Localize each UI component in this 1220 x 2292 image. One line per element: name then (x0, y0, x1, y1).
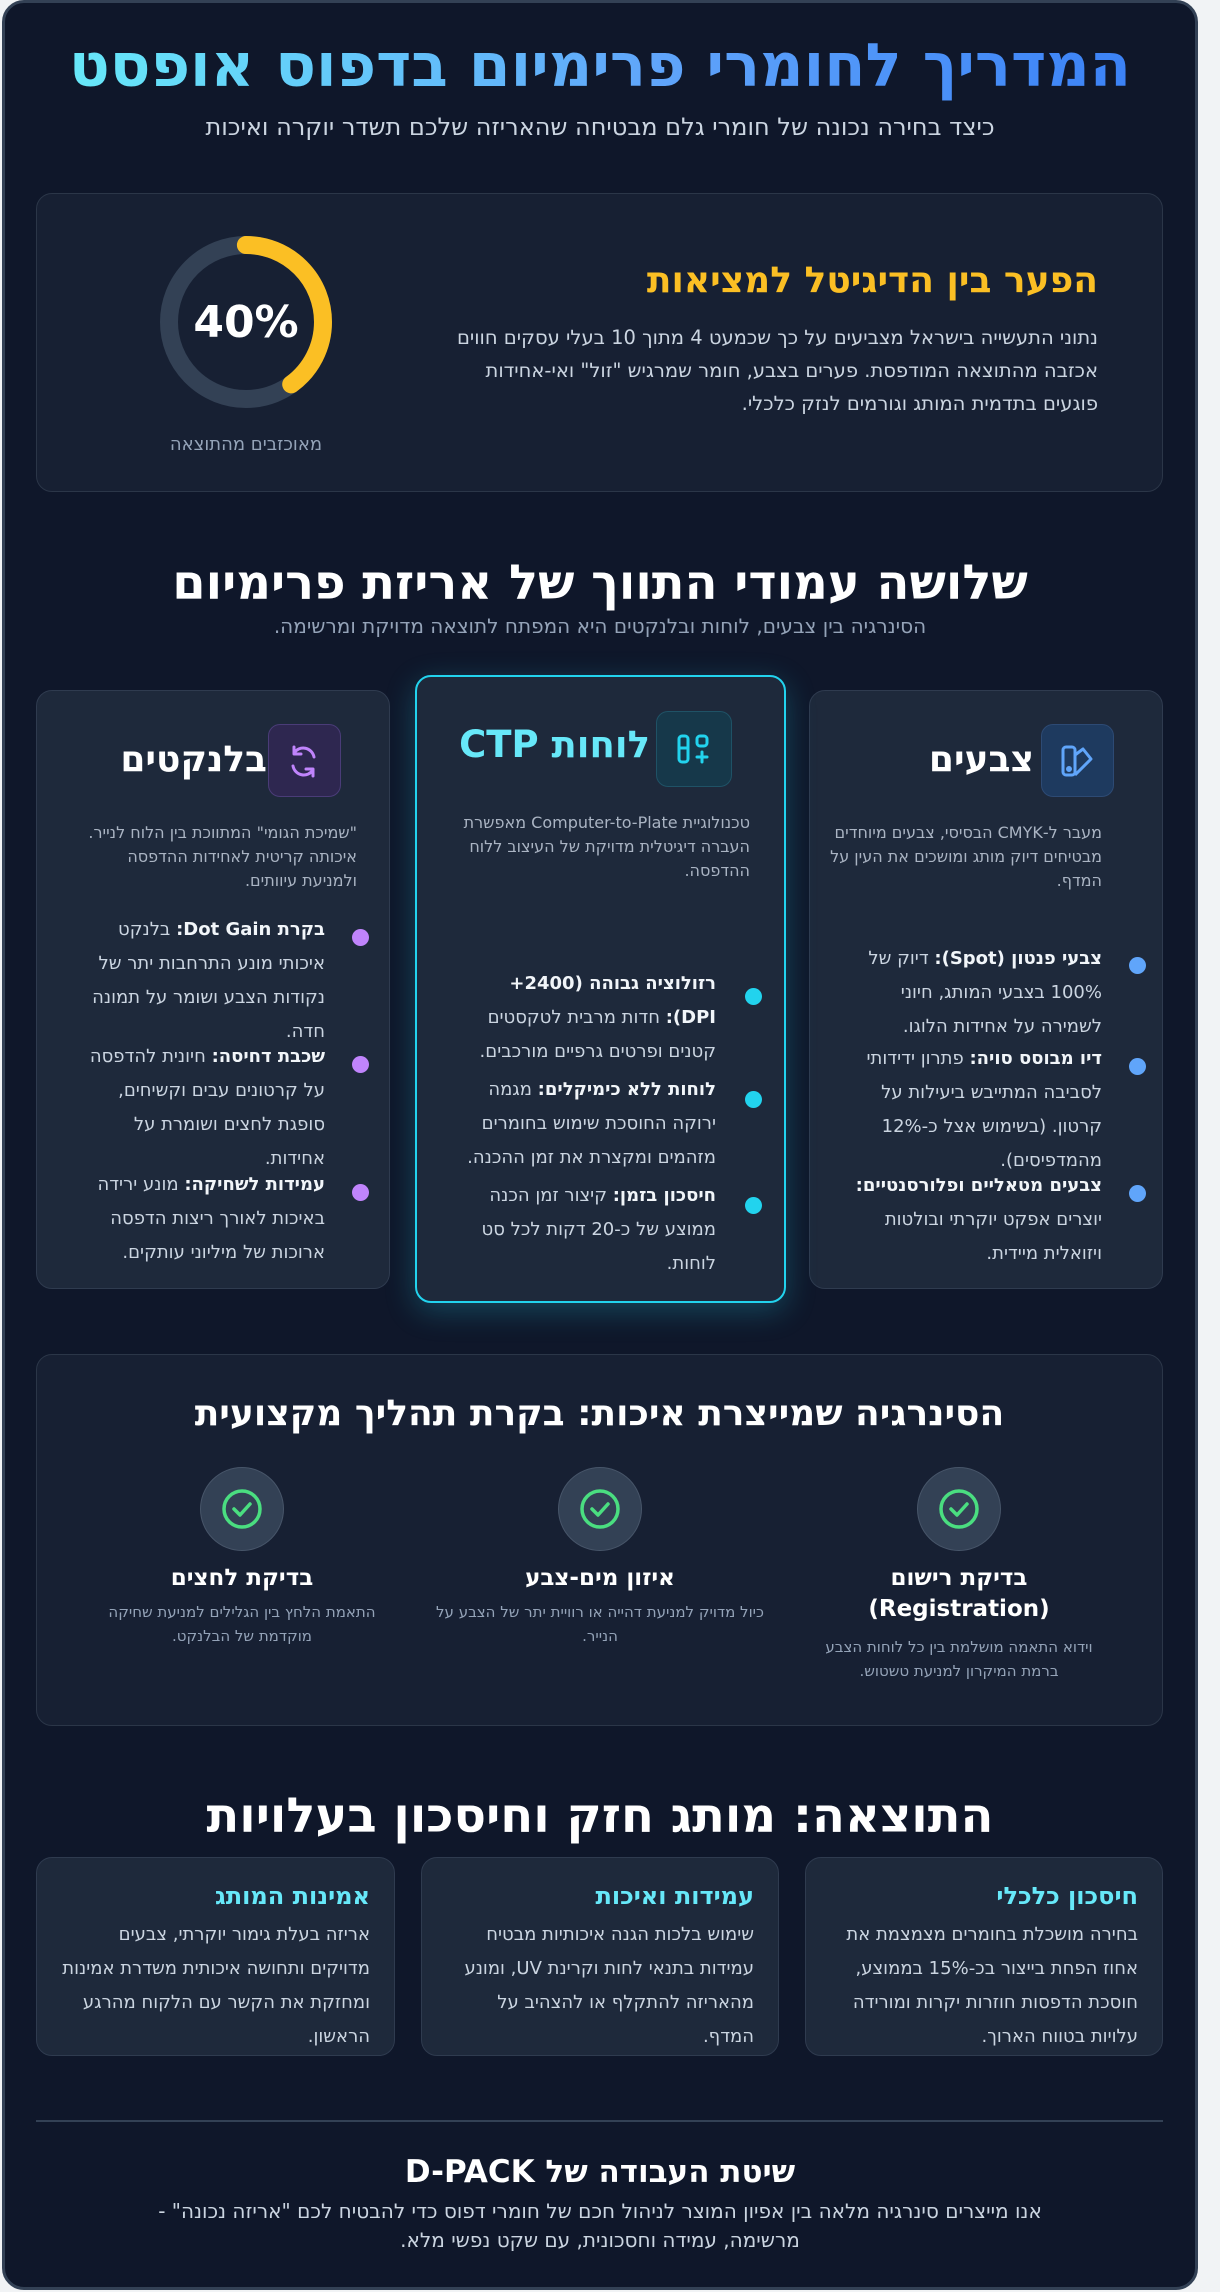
description: מעבר ל-CMYK הבסיסי, צבעים מיוחדים מבטיחים דיוק מותג ומושכים את העין על המדף. (830, 823, 1102, 890)
step: pressure check: התאמת הלחץ בין הגלילים למניעת שחיקה מוקדמת של הבלנקט. (108, 1603, 376, 1645)
card: brand credibility: אריזה בעלת גימור יוקרתי, צבעים מדויקים ותחושה איכותית משדרת אמינות ומחזקת את הקשר עם הלקוח מהרגע הראשון. (62, 1924, 370, 2047)
footer heading: שיטת העבודה של D-PACK (405, 2154, 795, 2190)
panel: synergy quality control (36, 1354, 1163, 1726)
bullet list: בקרת Dot Gain: בלנקט איכותי מונע התרחבות יתר של נקודות הצבע ושומר על תמונה חדה. (92, 919, 325, 1042)
card: economic savings (805, 1857, 1163, 2056)
icon: check (917, 1467, 1001, 1551)
subtitle: כיצד בחירה נכונה של חומרי גלם מבטיחה שהאריזה שלכם תשדר יוקרה ואיכות (205, 113, 995, 141)
bullet list: חיסכון בזמן: קיצור זמן הכנה ממוצע של כ-20 דקות לכל סט לוחות. (482, 1185, 716, 1274)
title: המדריך לחומרי פרימיום בדפוס אופסט (69, 31, 1131, 101)
donut caption: מאוכזבים מהתוצאה (170, 434, 322, 455)
bullet list: לוחות ללא כימיקלים: מגמה ירוקה החוסכת שימוש בחומרים מזהמים ומקצרת את זמן ההכנה. (467, 1079, 716, 1168)
bullet list (856, 948, 1146, 1264)
description: טכנולוגיית Computer-to-Plate מאפשרת העברה דיגיטלית מדויקת של העיצוב ללוח ההדפסה. (464, 813, 750, 880)
panel: CTP plates (highlighted) (415, 675, 786, 1303)
bullet list (467, 973, 762, 1274)
panel: digital gap stat (36, 193, 1163, 492)
heading: digital gap: הפער בין הדיגיטל למציאות (647, 260, 1098, 301)
body text: נתוני התעשייה בישראל מצביעים על כך שכמעט 4 מתוך 10 בעלי עסקים חווים אכזבה מהתוצאה המודפסת. פערים בצבע, חומר שמרגיש "זול" ואי-אחידות פוגעים בתדמית המותג וגורמים לנזק כלכלי. (457, 326, 1098, 415)
footer text: אנו מייצרים סינרגיה מלאה בין אפיון המוצר לניהול חכם של חומרי דפוס כדי להבטיח לכם "אריזה נכונה" - מרשימה, עמידה וחסכונית, עם שקט נפשי מלא. (158, 2199, 1042, 2252)
heading: inks: צבעים (929, 739, 1034, 780)
step: water-ink balance: איזון מים-צבע (525, 1565, 675, 1591)
panel: blankets (36, 690, 390, 1289)
icon: plates (656, 711, 732, 787)
card: economic savings: בחירה מושכלת בחומרים מצמצמת את אחוז הפחת בייצור בכ-15% בממוצע, חוסכת הדפסות חוזרות יקרות ומורידה עלויות בטווח הארוך. (846, 1924, 1138, 2047)
bullet list: דיו מבוסס סויה: פתרון ידידותי לסביבה המתייבש ביעילות על קרטון. (בשימוש אצל כ-12% מהמדפיסים). (867, 1048, 1102, 1171)
card: brand credibility: אמינות המותג (215, 1882, 370, 1910)
step: registration: וידוא התאמה מושלמת בין כל לוחות הצבע ברמת המיקרון למניעת טשטוש. (825, 1638, 1093, 1680)
step: registration: בדיקת רישום (891, 1565, 1027, 1591)
heading: synergy: הסינרגיה שמייצרת איכות: בקרת תהליך מקצועית (195, 1393, 1004, 1434)
card: brand credibility (36, 1857, 395, 2056)
step: water-ink balance (436, 1467, 764, 1645)
step: pressure check (108, 1467, 376, 1645)
section heading: three pillars: שלושה עמודי התווך של אריזת פרימיום (172, 555, 1028, 611)
icon: refresh (268, 724, 341, 797)
icon: check (558, 1467, 642, 1551)
icon: ink swatch (1041, 724, 1114, 797)
donut chart 40% (160, 236, 332, 408)
step: water-ink balance: כיול מדויק למניעת דהייה או רוויית יתר של הצבע על הנייר. (436, 1603, 764, 1645)
card: durability and quality: עמידות ואיכות (595, 1882, 754, 1910)
step: registration (825, 1467, 1093, 1680)
heading: CTP plates: לוחות CTP (459, 723, 650, 766)
bullet list: רזולוציה גבוהה (2400+ DPI): חדות מרבית לטקסטים קטנים ופרטים גרפיים מורכבים. (480, 973, 716, 1062)
card: durability and quality: שימוש בלכות הגנה איכותיות מבטיח עמידות בתנאי לחות וקרינת UV, ומונע מהאריזה להתקלף או להצהיב על המדף. (464, 1924, 754, 2047)
step: pressure check: בדיקת לחצים (171, 1565, 313, 1591)
donut chart 40%: 40% (193, 297, 299, 348)
panel: inks (809, 690, 1163, 1289)
card: durability and quality (421, 1857, 779, 2056)
card: economic savings: חיסכון כלכלי (996, 1882, 1138, 1910)
bullet list: עמידות לשחיקה: מונע ירידה באיכות לאורך ריצות הדפסה ארוכות של מיליוני עותקים. (97, 1174, 325, 1263)
icon: check (200, 1467, 284, 1551)
bullet list (90, 919, 369, 1263)
heading: blankets: בלנקטים (120, 739, 267, 780)
description: "שמיכת הגומי" המתווכת בין הלוח לנייר. איכותה קריטית לאחידות ההדפסה ולמניעת עיוותים. (88, 823, 357, 890)
bullet list: צבעי פנטון (Spot): דיוק של 100% בצבעי המותג, חיוני לשמירה על אחידות הלוגו. (868, 948, 1102, 1037)
bullet list: צבעים מטאליים ופלורסנטיים: יוצרים אפקט יוקרתי ובולטות ויזואלית מיידית. (856, 1175, 1102, 1264)
section subtitle: הסינרגיה בין צבעים, לוחות ובלנקטים היא המפתח לתוצאה מדויקת ומרשימה. (274, 614, 926, 638)
section heading: result: התוצאה: מותג חזק וחיסכון בעלויות (206, 1788, 994, 1844)
bullet list: שכבת דחיסה: חיונית להדפסה על קרטונים עבים וקשיחים, סופגת לחצים ושומרת על אחידות. (90, 1046, 325, 1169)
step: registration: (Registration) (868, 1596, 1050, 1622)
